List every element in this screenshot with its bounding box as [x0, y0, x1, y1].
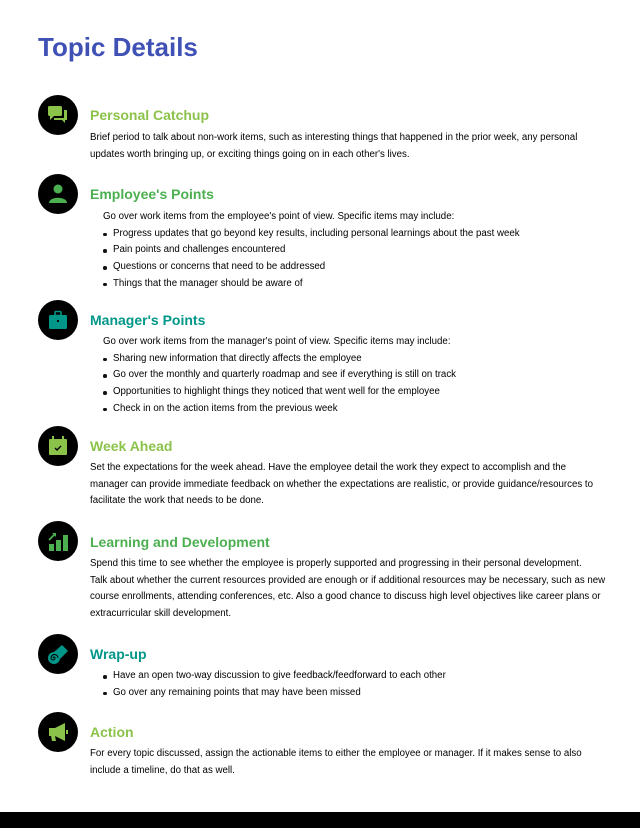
- icon: rolled mat: [38, 634, 78, 674]
- text: Learning and Development: course enrollments, attending conferences, etc. Also a good chance to discuss high level objectives like career plans or: [90, 591, 600, 602]
- list: Manager's Points: Opportunities to highlight things they noticed that went well for the employee: [113, 386, 440, 397]
- heading: Wrap-up: Wrap-up: [90, 646, 147, 662]
- icon: briefcase: [38, 300, 78, 340]
- icon: calendar: [38, 426, 78, 466]
- list: Manager's Points: Sharing new information that directly affects the employee: [113, 353, 362, 364]
- text: Personal Catchup: [90, 132, 577, 160]
- list: Employee's Points: Go over work items from the employee's point of view. Specific items may include:: [103, 211, 454, 222]
- text: Week Ahead: facilitate the work that needs to be done.: [90, 495, 264, 506]
- text: Week Ahead: manager can provide immediate feedback on whether the expectations are realistic, or provide guidance/resources to: [90, 479, 593, 490]
- text: Week Ahead: [90, 462, 593, 506]
- list: Wrap-up: [103, 670, 446, 698]
- list: Employee's Points: Progress updates that go beyond key results, including personal learnings about the past week: [113, 228, 520, 239]
- list: Employee's Points: Questions or concerns that need to be addressed: [113, 261, 325, 272]
- text: Personal Catchup: Brief period to talk about non-work items, such as interesting things that happened in the prior week, any personal: [90, 132, 577, 143]
- list: Employee's Points: Things that the manager should be aware of: [113, 278, 303, 289]
- text: Action: [90, 748, 582, 776]
- text: Learning and Development: Spend this time to see whether the employee is properly supported and progressing in their personal development.: [90, 558, 582, 569]
- heading: Employee's Points: Employee's Points: [90, 186, 214, 202]
- list: Manager's Points: Check in on the action items from the previous week: [113, 403, 338, 414]
- list: Wrap-up: Go over any remaining points that may have been missed: [113, 687, 361, 698]
- heading: Week Ahead: Week Ahead: [90, 438, 172, 454]
- text: Learning and Development: Talk about whether the current resources provided are enough or if additional resources may be necessary, such as new: [90, 575, 605, 586]
- text: Week Ahead: Set the expectations for the week ahead. Have the employee detail the work they expect to accomplish and the: [90, 462, 566, 473]
- icon: chat bubbles: [38, 95, 78, 135]
- list: Employee's Points: Pain points and challenges encountered: [113, 244, 285, 255]
- text: Personal Catchup: updates worth bringing up, or exciting things going on in each other's lives.: [90, 149, 410, 160]
- heading: Action: Action: [90, 724, 134, 740]
- text: Learning and Development: extracurricular skill development.: [90, 608, 231, 619]
- icon: megaphone: [38, 712, 78, 752]
- text: Action: include a timeline, do that as well.: [90, 765, 235, 776]
- list: Employee's Points: [103, 211, 520, 289]
- heading: Personal Catchup: Personal Catchup: [90, 107, 209, 123]
- list: Manager's Points: Go over the monthly and quarterly roadmap and see if everything is still on track: [113, 369, 456, 380]
- text: Action: For every topic discussed, assign the actionable items to either the employee or manager. If it makes sense to also: [90, 748, 582, 759]
- heading: Manager's Points: Manager's Points: [90, 312, 205, 328]
- title: Topic Details: [38, 32, 198, 62]
- icon: person: [38, 174, 78, 214]
- footer bar: [0, 812, 640, 828]
- list: Wrap-up: Have an open two-way discussion to give feedback/feedforward to each other: [113, 670, 446, 681]
- list: Manager's Points: Go over work items from the manager's point of view. Specific items may include:: [103, 336, 451, 347]
- heading: Learning and Development: Learning and Development: [90, 534, 270, 550]
- icon: growth chart: [38, 521, 78, 561]
- list: Manager's Points: [103, 336, 456, 414]
- text: Learning and Development: [90, 558, 606, 619]
